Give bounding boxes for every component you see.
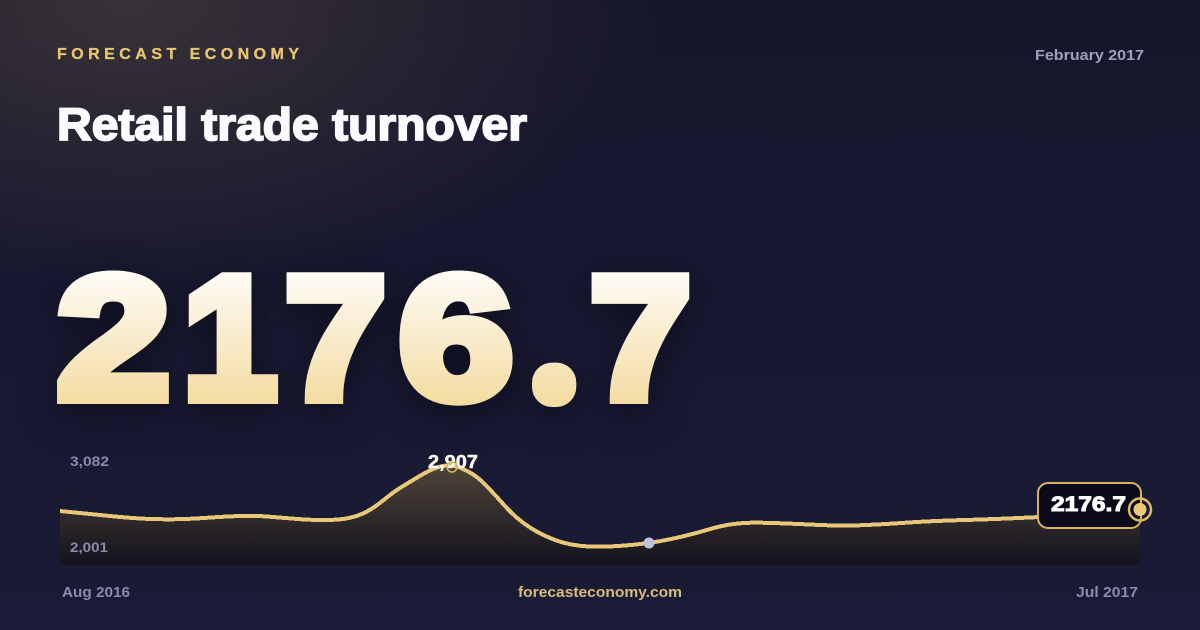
big number: 2176.7: 7: [590, 240, 691, 435]
x axis end label: Jul 2017: [1076, 584, 1138, 601]
area under line: [60, 466, 1140, 565]
current position dot: [644, 538, 654, 548]
big number: 2176.7: .: [550, 361, 558, 394]
date: February 2017: February 2017: [1035, 47, 1144, 64]
axis label: min: 2,001: [70, 540, 109, 555]
big number: 2176.7: 2: [57, 240, 170, 435]
callout: latest value: 2176.7: [1051, 493, 1126, 516]
big number: 2176.7: [57, 240, 691, 435]
big number: 2176.7: 1: [183, 240, 277, 435]
x axis start label: Aug 2016: [62, 584, 130, 601]
sparkline chart: [60, 452, 1151, 565]
callout: latest value: [1038, 483, 1141, 528]
axis label: max: 3,082: [70, 454, 109, 469]
line: [60, 466, 1040, 547]
end marker: [1129, 498, 1151, 520]
peak value label: 2,907: [428, 452, 478, 472]
eyebrow: FORECAST ECONOMY: FORECAST ECONOMY: [57, 46, 299, 63]
title: Retail trade turnover: [57, 99, 527, 150]
big number: 2176.7: 7: [285, 240, 386, 435]
peak marker: [447, 462, 457, 472]
source: forecasteconomy.com: forecasteconomy.com: [518, 584, 682, 601]
big number: 2176.7: 6: [399, 240, 513, 435]
